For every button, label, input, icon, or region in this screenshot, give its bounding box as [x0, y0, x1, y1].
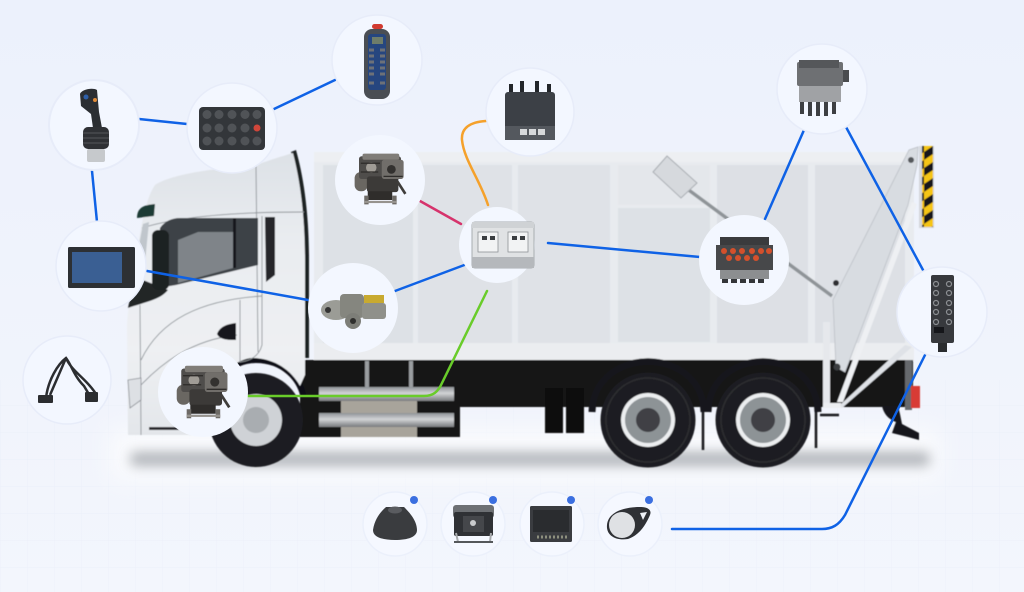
- line: IO module to accessories: [672, 355, 925, 529]
- connector lines: [92, 80, 925, 529]
- rear lift frame: [823, 147, 918, 408]
- line: controller to valve: [548, 243, 700, 257]
- truck illustration: [127, 146, 934, 468]
- line: joystick to screen: [92, 171, 97, 222]
- line: router to controller: [462, 121, 488, 205]
- tail light: [905, 360, 920, 410]
- rear wheel 1: [600, 372, 696, 468]
- wheel arch: [206, 360, 303, 420]
- cab rear pillar: [291, 150, 309, 358]
- ground shadow: [130, 452, 930, 466]
- accessory: brush: [363, 492, 427, 556]
- line: valve to top valve: [765, 130, 804, 219]
- window pillar: [233, 218, 236, 268]
- side window: [158, 218, 258, 288]
- node: wiring harness: [23, 336, 111, 424]
- door vent: [265, 217, 275, 282]
- hazard stripe board: [919, 146, 934, 228]
- line: controller to front engine: [248, 291, 487, 396]
- node: display screen: [56, 221, 146, 311]
- node: joystick: [49, 80, 139, 170]
- rear wheel 2: [716, 372, 810, 468]
- rear lift arm rod: [686, 188, 832, 296]
- lower grille: [149, 427, 179, 430]
- mud flap struts: [703, 410, 839, 450]
- chassis: [300, 360, 913, 437]
- line: top valve to IO module: [846, 127, 923, 270]
- node: button keypad: [187, 83, 277, 173]
- background grid: [0, 380, 1024, 592]
- line: screen to pump: [147, 271, 308, 300]
- rear fenders: [592, 362, 818, 412]
- windscreen: [138, 222, 149, 262]
- sun visor: [137, 204, 155, 218]
- node: top valve manifold: [777, 44, 867, 134]
- mirror: [152, 230, 169, 290]
- node: central controller: [459, 207, 535, 283]
- cab seams: [140, 165, 304, 435]
- window reflection: [178, 232, 233, 283]
- line: engine to controller: [420, 201, 461, 224]
- cab front bumper dark: [128, 280, 168, 308]
- node: IO module: [897, 267, 987, 357]
- front headlight: [128, 378, 141, 408]
- ground glow: [110, 430, 940, 480]
- line: pump to controller: [395, 264, 467, 291]
- front wheel: [209, 373, 303, 467]
- cargo body: [314, 152, 914, 361]
- node: wireless remote: [332, 15, 422, 105]
- accessory: camera: [441, 492, 505, 556]
- node: top engine: [335, 135, 425, 225]
- node: front engine: [158, 347, 248, 437]
- rear underrun bracket: [882, 406, 919, 440]
- lift arm plate: [653, 156, 697, 198]
- node: network router: [486, 68, 574, 156]
- door handle: [217, 323, 236, 340]
- accessory: RFID tag: [598, 492, 662, 556]
- line: joystick to keypad: [139, 119, 187, 124]
- accessory: monitor: [520, 492, 584, 556]
- node: hydraulic pump: [308, 263, 398, 353]
- node: hydraulic valve block: [699, 215, 789, 305]
- cab body: [127, 153, 305, 435]
- line: keypad to remote: [274, 80, 335, 109]
